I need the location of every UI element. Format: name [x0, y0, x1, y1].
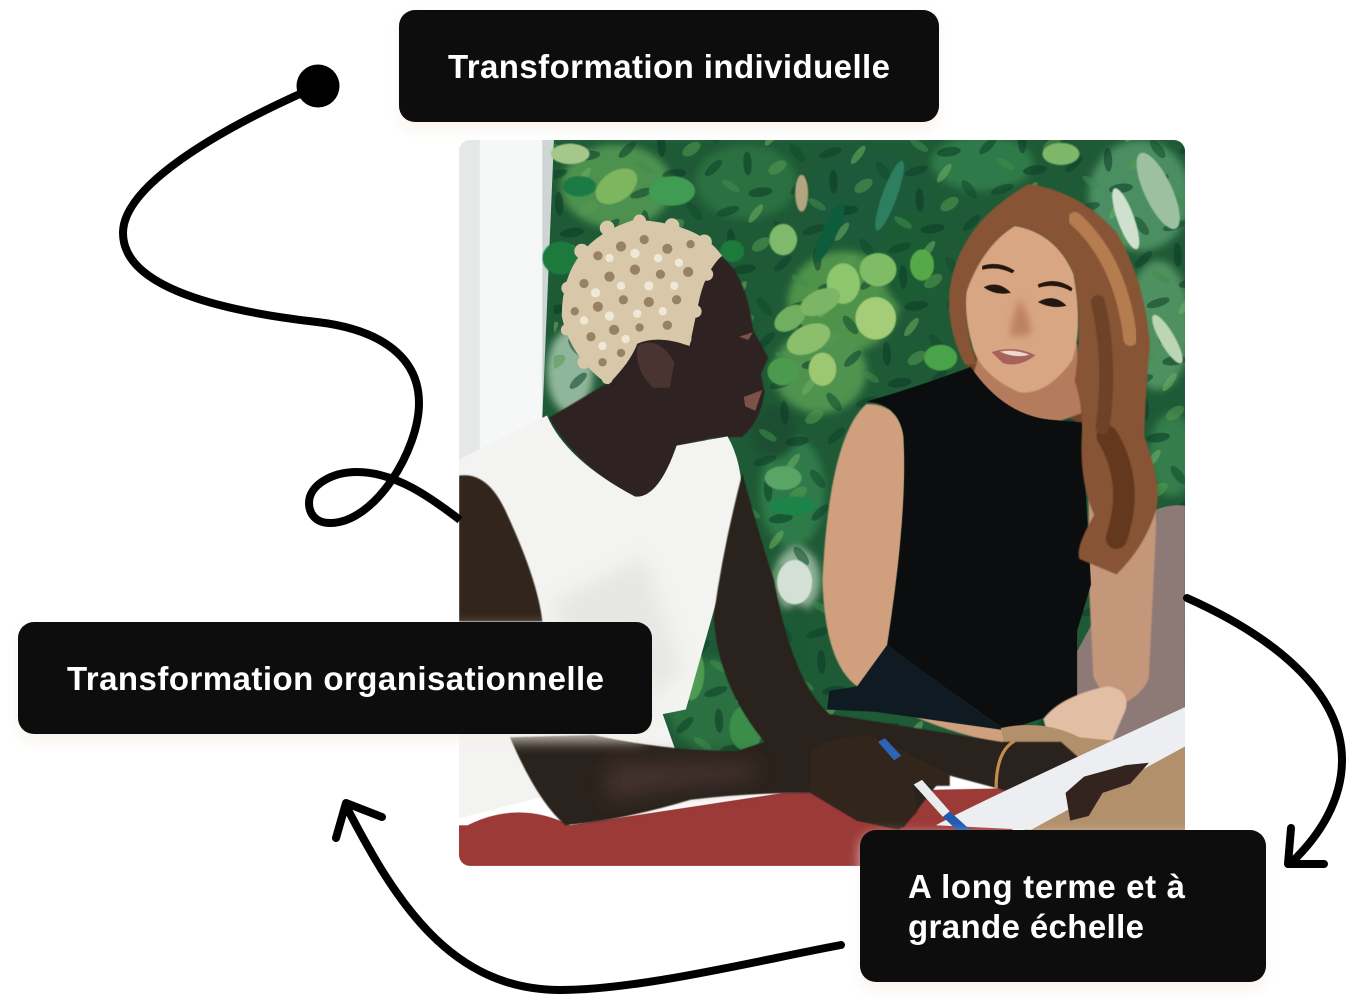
shoulder arm: [459, 475, 542, 622]
card: Transformation individuelle: [399, 10, 939, 122]
arrow: right curve down to lower card: [1187, 598, 1342, 864]
bleached curly hair: [561, 215, 722, 384]
fingers under paper: [1066, 763, 1149, 821]
card: A long terme et à grande échelle: A long terme et à: [908, 868, 1186, 905]
black top: [866, 367, 1091, 730]
shirt fold shading: [560, 566, 674, 685]
couch: [1066, 505, 1185, 742]
eye and lips: [739, 332, 762, 411]
card: Transformation organisationnelle: Transformation organisationnelle: [67, 660, 604, 697]
left arm: [822, 403, 1004, 743]
blue pen: [878, 738, 973, 835]
hand: [1042, 686, 1128, 741]
white shirt: [459, 415, 742, 818]
back hair: [964, 353, 1089, 427]
neck: [973, 344, 1082, 422]
woman left: [459, 215, 1082, 830]
neck and head: [549, 256, 768, 499]
gold bracelet: [996, 741, 1015, 788]
cheek and nose shading: [1010, 297, 1031, 337]
window frame background: [459, 140, 554, 460]
hand: [811, 736, 950, 830]
face: [966, 226, 1078, 393]
dark navy hem: [827, 645, 1005, 730]
card: A long terme et à grande échelle: [860, 830, 1266, 982]
connector curve with start dot: [123, 64, 460, 523]
sheet of paper: [936, 707, 1185, 830]
forearm highlight: [607, 763, 765, 802]
photo: two women talking in front of a plant wall: [459, 135, 1195, 866]
woman right: [822, 184, 1158, 751]
red trousers: [459, 788, 1015, 866]
beige trousers: [1001, 725, 1185, 866]
hair highlights: [1075, 219, 1130, 538]
arrow: bottom curve up to left card: [336, 803, 841, 990]
card: Transformation organisationnelle: [18, 622, 652, 734]
facial features: [982, 264, 1072, 364]
ear: [637, 343, 674, 388]
bent arm: [510, 473, 1082, 828]
card: Transformation individuelle: Transformation individuelle: [448, 48, 890, 85]
card: A long terme et à grande échelle: grande échelle: [908, 908, 1144, 945]
long hair: [949, 184, 1158, 574]
plant wall foliage: [542, 135, 1195, 760]
right arm: [1088, 498, 1156, 702]
